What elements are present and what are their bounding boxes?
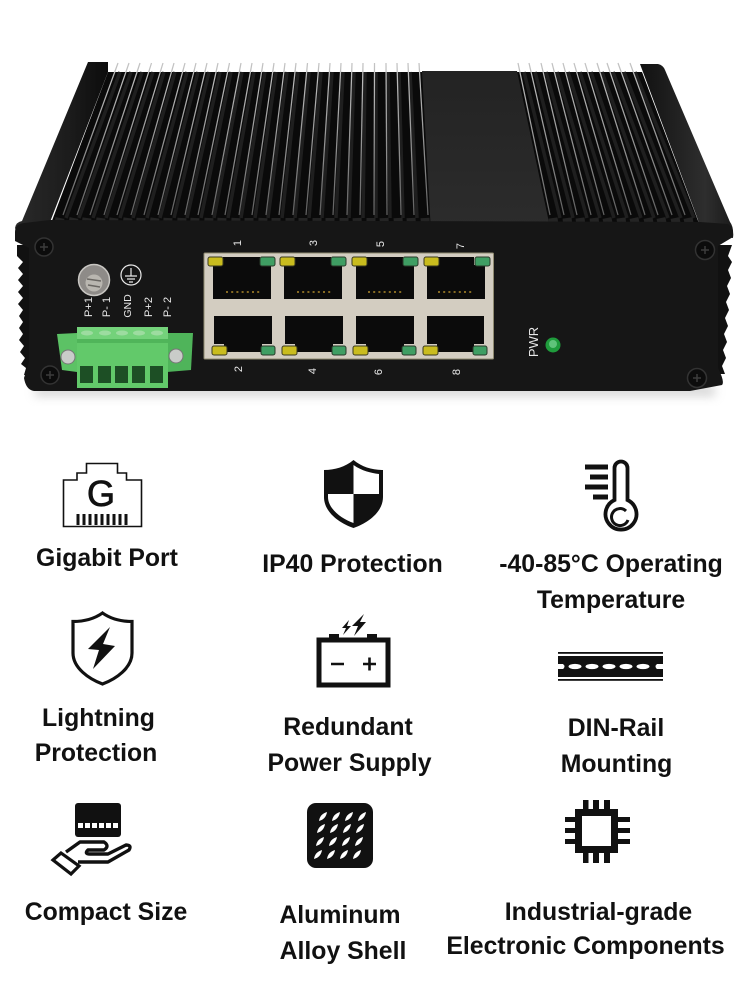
label: Redundant (283, 714, 413, 741)
port numbers: 5 (375, 241, 387, 247)
icon: thermometer (585, 462, 636, 530)
power terminal labels: P+2 (143, 297, 155, 317)
port numbers: 3 (308, 240, 320, 246)
RJ45 port block (204, 253, 494, 359)
power terminal labels (83, 294, 174, 318)
feature: DIN-Rail Mounting: Mounting (561, 751, 672, 778)
icon: lightning shield (73, 613, 132, 684)
front face (15, 220, 733, 391)
port numbers: 2 (233, 366, 245, 372)
feature: Aluminum Alloy Shell: Alloy Shell (280, 938, 406, 965)
label: Aluminum (279, 902, 401, 929)
green terminal block (57, 327, 193, 388)
label: IP40 Protection (262, 551, 443, 578)
feature: Compact Size (25, 803, 187, 926)
icon: chip (565, 800, 630, 863)
heatsink top (50, 63, 700, 234)
port numbers: 1 (232, 240, 244, 246)
PWR label: PWR (526, 327, 541, 357)
PWR LED (546, 338, 560, 352)
icon: RJ45 gigabit port: G (87, 473, 115, 514)
port numbers: 4 (307, 368, 319, 374)
icon: checkered shield (324, 460, 383, 528)
feature: IP40 Protection (262, 460, 443, 578)
feature: Aluminum Alloy Shell (279, 803, 406, 965)
device drop shadow (35, 386, 715, 396)
label: Lightning (42, 705, 155, 732)
green LEDs (260, 257, 490, 355)
label: DIN-Rail (568, 715, 664, 742)
feature: Gigabit Port (36, 464, 178, 572)
feature: Industrial-grade Electronic Components (446, 800, 725, 960)
icon: aluminum fin texture (307, 803, 373, 868)
feature: DIN-Rail Mounting (558, 652, 672, 778)
label: Industrial-grade (505, 899, 692, 926)
port numbers: 8 (451, 369, 463, 375)
port numbers: 7 (455, 243, 467, 249)
icon: hand holding switch (53, 803, 130, 874)
power terminal labels: P+1 (83, 297, 95, 317)
icon: RJ45 gigabit port (64, 464, 142, 526)
power terminal labels: P- 1 (101, 297, 113, 317)
feature: Lightning Protection (35, 613, 157, 767)
icon: battery (319, 614, 388, 685)
icon: DIN rail (558, 652, 663, 681)
ground screw (78, 264, 110, 296)
product photo: industrial ethernet switch (15, 62, 733, 396)
side cooling fins (17, 245, 732, 375)
feature: Operating Temperature (499, 462, 723, 614)
ground symbol (121, 265, 141, 285)
yellow LEDs (208, 257, 439, 355)
power terminal labels: GND (122, 294, 134, 318)
plate shadow (429, 224, 552, 234)
port numbers (232, 240, 467, 375)
feature: Redundant Power Supply: Power Supply (268, 750, 432, 777)
gold contact pins (226, 291, 473, 293)
left rail (15, 62, 108, 240)
label: Compact Size (25, 899, 187, 926)
power terminal labels: P- 2 (162, 297, 174, 317)
feature: Redundant Power Supply (268, 614, 432, 777)
right rail (640, 64, 733, 238)
flat label plate (422, 71, 551, 232)
label: -40-85°C Operating (499, 551, 723, 578)
screws (35, 238, 714, 388)
feature: Lightning Protection: Protection (35, 740, 157, 767)
feature: Industrial-grade Electronic Components: Electronic Components (446, 933, 725, 960)
fin end teeth (57, 218, 691, 233)
feature: Operating Temperature: Temperature (537, 587, 685, 614)
label: Gigabit Port (36, 545, 178, 572)
port numbers: 6 (373, 369, 385, 375)
